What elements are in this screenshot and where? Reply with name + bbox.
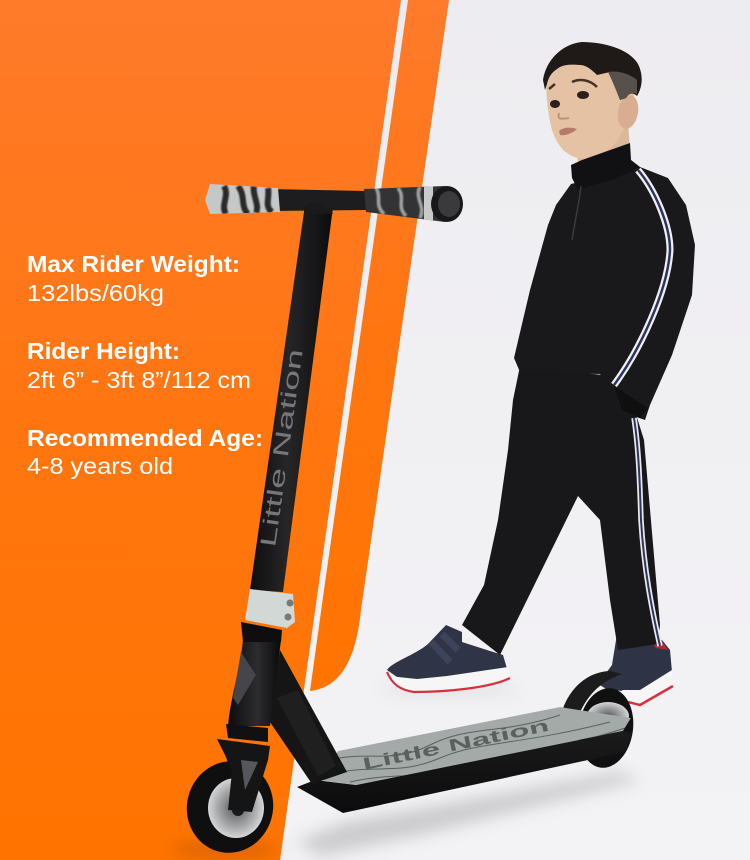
recommended age: 4-8 years old [27, 453, 173, 479]
orange left panel [0, 0, 401, 860]
trousers [462, 366, 660, 655]
stem tube [250, 205, 333, 592]
recommended age: Recommended Age: [27, 425, 263, 451]
bar joint [303, 201, 333, 214]
rider height: 2ft 6” - 3ft 8”/112 cm [27, 367, 251, 393]
rider height: Rider Height: [27, 338, 180, 364]
front wheel [177, 751, 283, 860]
logo cutout [233, 652, 256, 705]
lower headset [226, 724, 268, 742]
left grip [205, 184, 280, 214]
clamp [245, 589, 295, 628]
deck logo: Little Nation [361, 716, 551, 774]
neck [576, 120, 630, 172]
max rider weight [27, 251, 240, 306]
boy [387, 42, 695, 705]
headset ring [241, 622, 282, 642]
jacket [514, 167, 695, 420]
front fork [217, 739, 270, 812]
zipper [572, 186, 581, 240]
down tube [270, 650, 347, 784]
rear wheel [560, 671, 638, 771]
scooter [177, 182, 638, 860]
max rider weight: Max Rider Weight: [27, 251, 240, 277]
hair fade [608, 71, 637, 100]
hair [543, 42, 642, 100]
right shoe [598, 634, 673, 705]
ear [615, 94, 641, 130]
face [546, 56, 636, 159]
eyes and mouth [549, 80, 597, 135]
grip end cap [431, 186, 463, 222]
deck top with pattern [318, 707, 631, 785]
specs text [27, 251, 263, 479]
sleeve stripe [614, 170, 670, 385]
hand in pocket [614, 386, 648, 418]
left shoe [387, 625, 510, 692]
right grip [364, 186, 446, 222]
collar [571, 143, 640, 190]
floor shadows [170, 685, 640, 858]
stem logo: Little Nation [255, 347, 308, 549]
trouser stripe [634, 418, 660, 646]
recommended age [27, 425, 263, 479]
handlebar crossbar [268, 189, 366, 211]
rider height [27, 338, 251, 393]
orange slanted band with rounded foot [310, 0, 449, 691]
max rider weight: 132lbs/60kg [27, 280, 164, 306]
head tube [228, 640, 281, 726]
rear fender [560, 671, 622, 727]
deck side [297, 731, 632, 813]
